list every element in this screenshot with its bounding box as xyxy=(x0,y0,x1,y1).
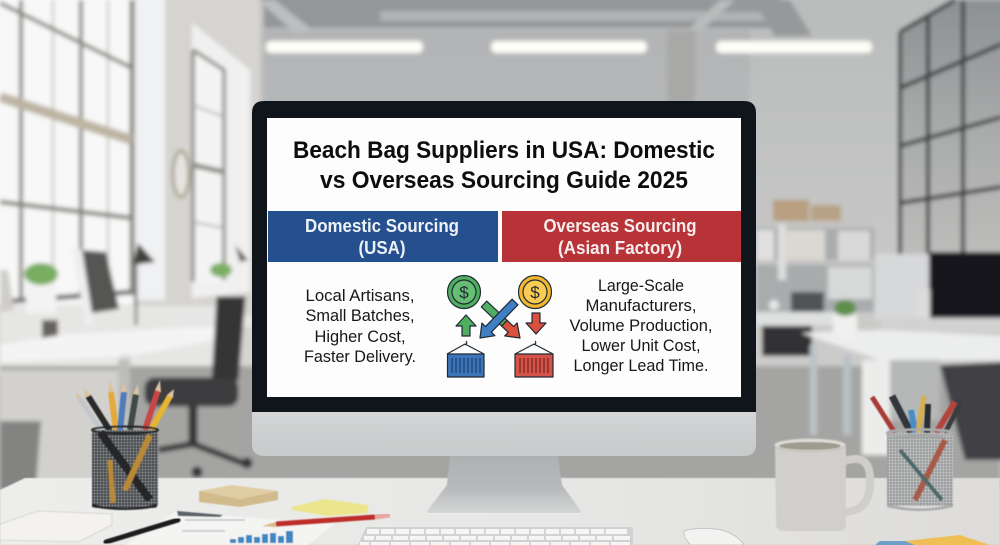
text block: overseas traits xyxy=(570,277,712,375)
black pen xyxy=(106,520,178,542)
arrow: green up xyxy=(456,315,476,336)
icon: red shipping container xyxy=(515,341,553,377)
pen cup left xyxy=(76,380,174,510)
text block: domestic traits: Faster Delivery. xyxy=(304,348,416,366)
text block: overseas traits: Manufacturers, xyxy=(586,297,696,315)
panel header: overseas sourcing: Overseas Sourcing xyxy=(544,216,696,236)
panel header: domestic sourcing: (USA) xyxy=(358,238,406,258)
text block: overseas traits: Lower Unit Cost, xyxy=(582,337,700,355)
yellow sticky pad xyxy=(292,499,368,516)
arrow: green to red diagonal xyxy=(481,301,520,338)
coloured papers bottom right xyxy=(875,535,990,545)
panel header: domestic sourcing: Domestic Sourcing xyxy=(305,216,459,236)
title: Beach Bag Suppliers in USA: Domestic xyxy=(293,137,715,164)
text block: domestic traits: Local Artisans, xyxy=(306,287,414,305)
arrow: red down xyxy=(526,313,546,334)
tan sticky pad xyxy=(199,485,278,507)
left cabinet and bin xyxy=(0,360,130,490)
office chair xyxy=(145,297,252,477)
monitor screen xyxy=(267,118,741,397)
panel header: overseas sourcing: (Asian Factory) xyxy=(558,238,682,258)
right window with dark frame xyxy=(900,0,1000,255)
right wall xyxy=(750,0,1000,430)
ceiling and ducts xyxy=(250,0,812,105)
arrow: blue diagonal xyxy=(480,299,518,338)
centre wall xyxy=(250,30,760,430)
text block: overseas traits: Longer Lead Time. xyxy=(574,357,708,375)
monitor stand xyxy=(427,456,581,515)
left background desk with monitor and plant xyxy=(0,243,252,380)
red pencil xyxy=(262,515,390,527)
document with bar chart xyxy=(125,511,335,545)
text block: domestic traits: Higher Cost, xyxy=(314,328,406,346)
mouse xyxy=(684,528,744,545)
icon group: sourcing flow xyxy=(447,276,553,377)
notepad xyxy=(0,511,112,542)
title: vs Overseas Sourcing Guide 2025 xyxy=(320,167,688,194)
panel header: overseas sourcing xyxy=(502,211,741,262)
shelf with boxes and binders xyxy=(756,200,874,356)
keyboard xyxy=(358,527,633,545)
text block: overseas traits: Large-Scale xyxy=(598,277,684,295)
text block: domestic traits xyxy=(304,287,416,366)
icon: blue shipping container xyxy=(447,341,484,377)
title xyxy=(293,137,715,194)
coffee mug xyxy=(774,438,870,531)
right background desk and plant xyxy=(801,300,1000,460)
floor xyxy=(0,366,1000,491)
desk surface xyxy=(0,478,1000,545)
monitor bezel xyxy=(252,101,756,412)
icon: green dollar coin: $ xyxy=(459,283,469,302)
right background monitors xyxy=(875,252,1000,334)
ceiling lights xyxy=(266,41,872,53)
left wall and tall window xyxy=(0,0,260,375)
text block: domestic traits: Small Batches, xyxy=(306,307,414,325)
icon: yellow dollar coin: $ xyxy=(530,283,540,302)
panel header: domestic sourcing xyxy=(268,211,498,262)
monitor chin xyxy=(252,405,756,456)
pen cup right xyxy=(872,396,961,511)
text block: overseas traits: Volume Production, xyxy=(570,317,712,335)
